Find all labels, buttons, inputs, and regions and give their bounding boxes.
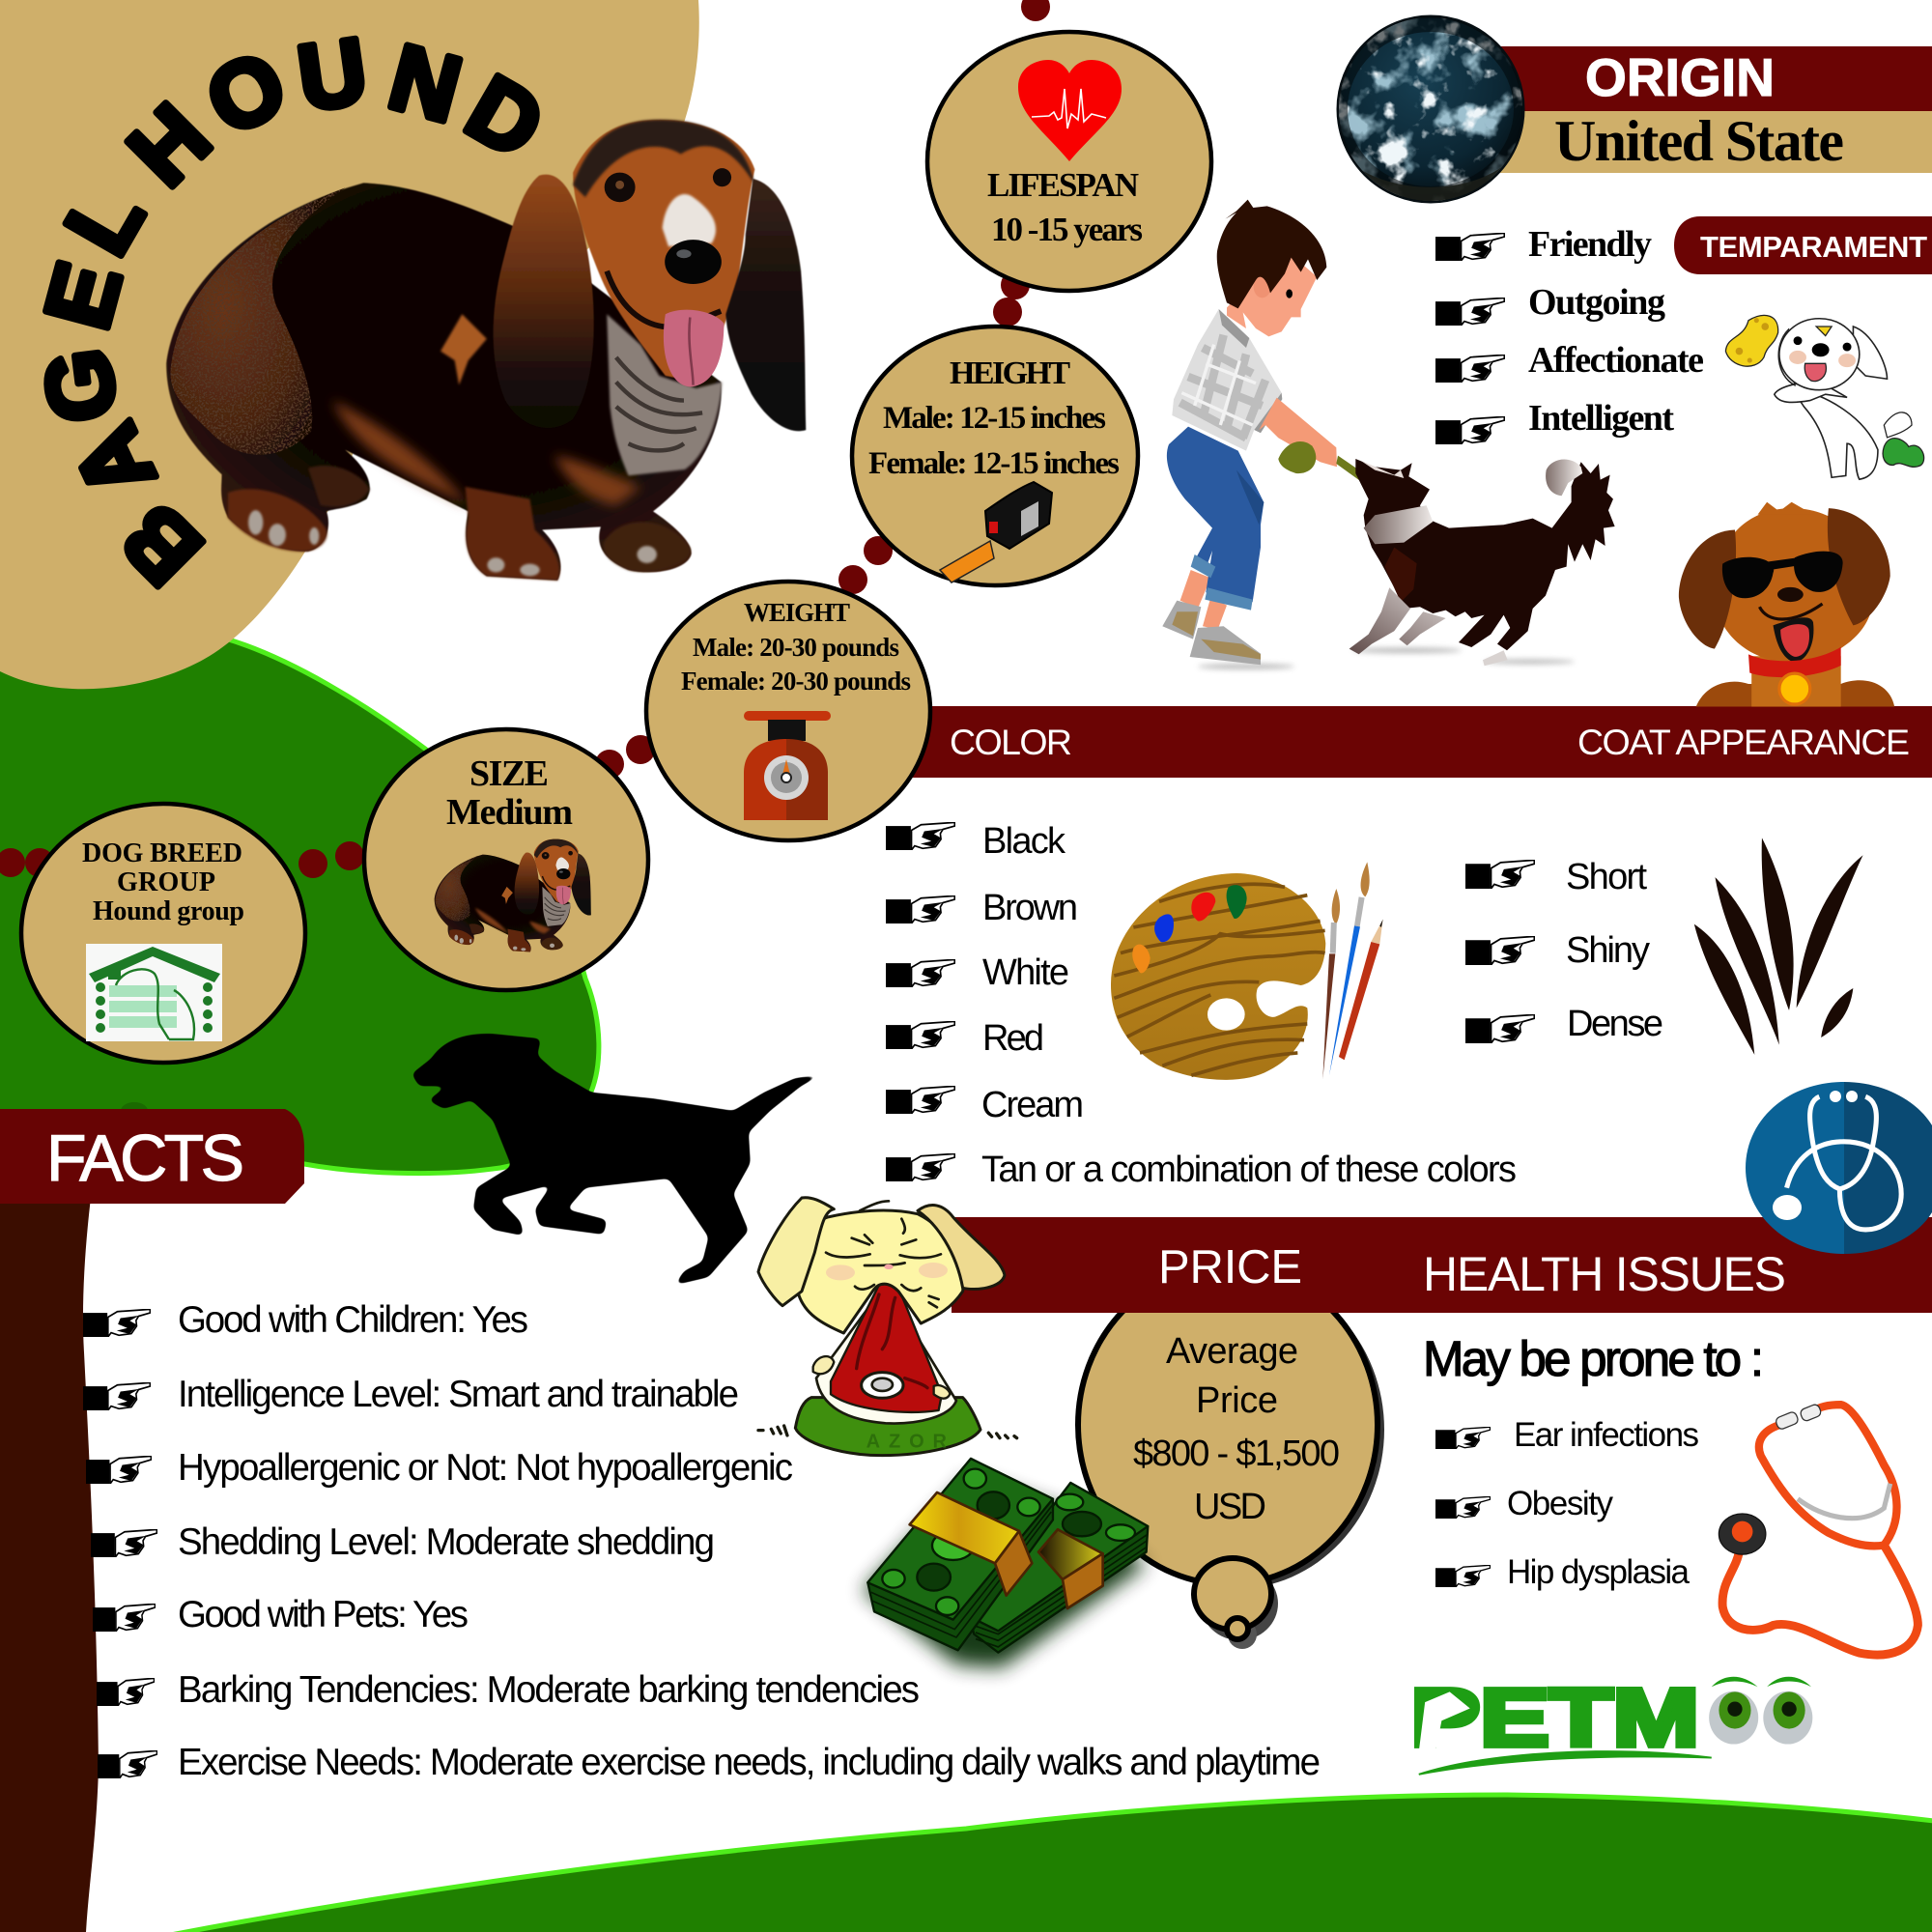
origin banner: ORIGIN (1585, 47, 1775, 107)
icon: weighing scale (744, 711, 831, 820)
icon: heart (1018, 60, 1122, 161)
circle: height: Female: 12-15 inches (868, 446, 1120, 481)
circle: lifespan (927, 32, 1211, 291)
circle: weight: Male: 20-30 pounds (693, 633, 899, 662)
boy: arms (1259, 398, 1337, 467)
item: Short (1465, 857, 1647, 897)
illustration: puppy with sunglasses (1679, 502, 1894, 707)
list: coat appearance (1465, 857, 1663, 1044)
circle: size: Medium (446, 792, 573, 833)
temperament pill: TEMPARAMENT (1700, 230, 1927, 264)
fact: hypoallergenic: Hypoallergenic or Not: Not hypoallergenic (178, 1447, 793, 1489)
item: ear infections: Ear infections (1514, 1416, 1699, 1454)
origin banner (1488, 46, 1932, 173)
icon: dog house logo (86, 944, 222, 1041)
boy: legs and shoes (1162, 427, 1264, 665)
icon: globe (1338, 16, 1523, 208)
circle: height: HEIGHT (950, 355, 1070, 391)
item: Black (886, 821, 1066, 862)
circle: lifespan: LIFESPAN (987, 166, 1139, 204)
fact: intelligence: Intelligence Level: Smart and trainable (178, 1374, 739, 1415)
item: Outgoing (1435, 282, 1665, 326)
price bubble: Average (1166, 1331, 1298, 1372)
item: Short: Short (1566, 857, 1647, 897)
list: facts (83, 1299, 1321, 1783)
item: Shiny (1465, 930, 1650, 971)
item: Black: Black (982, 821, 1066, 862)
item: Intelligent: Intelligent (1528, 398, 1674, 439)
price bubble: Price (1196, 1380, 1278, 1421)
circle: weight (646, 582, 930, 840)
price bubble (1078, 1265, 1384, 1649)
silhouette: running dog (412, 1034, 822, 1285)
fact: good with children: Good with Children: Yes (178, 1299, 528, 1341)
circle: dog breed group: DOG BREED (82, 838, 242, 868)
ground shadows (1198, 647, 1575, 669)
icon: tape measure (940, 482, 1052, 582)
FACTS banner (0, 1102, 304, 1204)
illustration: artist palette and brushes (1111, 862, 1383, 1080)
band: color and coat appearance: COAT APPEARANCE (1577, 722, 1910, 762)
dog illustration: basset hound (166, 120, 806, 581)
item: Red: Red (982, 1018, 1044, 1059)
circle: weight: Female: 20-30 pounds (681, 667, 911, 696)
logo: PETMOO: PETM (1410, 1672, 1699, 1763)
circle: weight: WEIGHT (744, 598, 850, 627)
price bubble: $800 - $1,500 (1133, 1434, 1340, 1474)
circle: height: Male: 12-15 inches (883, 401, 1106, 436)
item: Intelligent (1435, 398, 1674, 444)
boy: head (1217, 200, 1326, 336)
money stacks (863, 1459, 1148, 1668)
item: hip dysplasia: Hip dysplasia (1507, 1553, 1690, 1591)
tree trunk (0, 1198, 99, 1932)
item: Friendly: Friendly (1528, 224, 1652, 265)
timeline connector dots (0, 0, 1050, 878)
illustration: bunny eating meat: AZOR (867, 1431, 948, 1452)
ground: green hill (126, 1795, 1932, 1932)
circle: dog breed group: GROUP (117, 867, 215, 897)
list: colors (886, 821, 1517, 1190)
item: Brown: Brown (982, 888, 1078, 928)
temperament pill (1674, 216, 1932, 274)
fact: good with pets: Good with Pets: Yes (178, 1594, 469, 1635)
list: health issues (1435, 1416, 1699, 1591)
fact: exercise: Exercise Needs: Moderate exercise needs, including daily walks and playtime (178, 1742, 1321, 1783)
price bubble: USD (1194, 1487, 1266, 1527)
circle: size (364, 729, 648, 990)
rope toy (1278, 441, 1374, 485)
illustration: bunny eating meat (758, 1198, 1017, 1456)
circle: lifespan: 10 -15 years (991, 211, 1143, 248)
item: Tan or a combination: Tan or a combination of these colors (981, 1150, 1517, 1190)
item: obesity: Obesity (1507, 1485, 1613, 1522)
circle: size: SIZE (469, 753, 549, 794)
item: Shiny: Shiny (1566, 930, 1650, 971)
item: obesity (1435, 1485, 1613, 1522)
illustration: cartoon dog with toys (1725, 315, 1924, 479)
item: Brown (886, 888, 1078, 928)
circle: dog breed group: Hound group (93, 896, 244, 926)
circle: dog breed group (21, 804, 305, 1063)
border collie (1350, 459, 1615, 666)
item: Cream: Cream (981, 1085, 1084, 1125)
item: White: White (982, 952, 1069, 993)
icon: orange stethoscope (1719, 1404, 1918, 1655)
origin banner: United State (1554, 109, 1844, 173)
item: Affectionate: Affectionate (1528, 340, 1704, 381)
icon: fur tufts (1694, 838, 1863, 1055)
illustration: boy playing tug with dog (1162, 200, 1615, 669)
fact: barking: Barking Tendencies: Moderate barking tendencies (178, 1669, 920, 1711)
logo: PETMOO (1410, 1672, 1812, 1775)
item: Affectionate (1435, 340, 1704, 383)
boy: shirt (1172, 309, 1282, 451)
icon: stethoscope badge (1746, 1082, 1932, 1254)
icon: mini dog in size circle (435, 839, 591, 952)
band: color and coat appearance: COLOR (950, 722, 1072, 762)
title background: tan blob (0, 0, 699, 689)
band: color and coat appearance (908, 706, 1932, 778)
item: Dense (1465, 1004, 1663, 1044)
item: Red (886, 1018, 1044, 1059)
circle: height (852, 327, 1138, 585)
item: Cream (886, 1085, 1084, 1125)
band: price and health issues (952, 1217, 1932, 1313)
item: Dense: Dense (1567, 1004, 1663, 1044)
item: Outgoing: Outgoing (1528, 282, 1665, 323)
fact: shedding: Shedding Level: Moderate shedding (178, 1521, 715, 1563)
band: price and health issues: PRICE (1158, 1241, 1302, 1293)
list: temperament (1435, 224, 1704, 444)
title: BAGELHOUND: BAGELHOUND (25, 19, 560, 605)
heading: may be prone to: May be prone to : (1423, 1331, 1764, 1386)
band: price and health issues: HEALTH ISSUES (1423, 1247, 1786, 1301)
FACTS banner: FACTS (46, 1122, 244, 1195)
tree canopy: green blob (0, 638, 599, 1174)
item: White (886, 952, 1069, 993)
item: Friendly (1435, 224, 1652, 265)
